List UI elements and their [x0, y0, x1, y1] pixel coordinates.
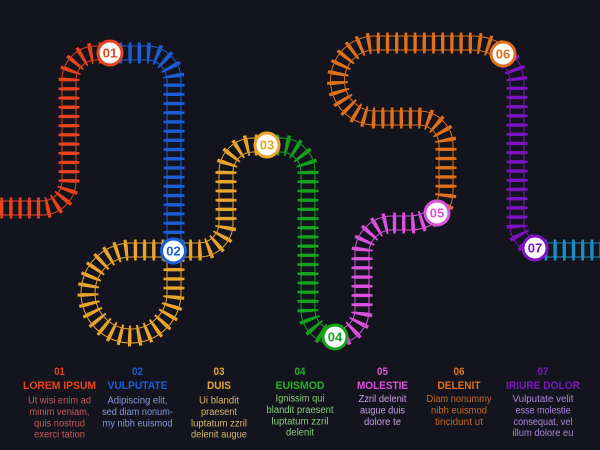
station marker 03 [255, 133, 279, 157]
legend item 07: esse molestie [516, 406, 571, 416]
legend item 04: 04 [294, 366, 306, 378]
legend item 03: praesent [201, 407, 237, 418]
legend item 05: MOLESTIE [357, 380, 408, 392]
station marker 04: 04 [328, 330, 343, 344]
legend item 06: 06 [454, 366, 464, 378]
track: teal segment [535, 249, 600, 251]
station marker 07 [523, 236, 547, 260]
legend item 07: IRIURE DOLOR [506, 380, 580, 392]
legend item 04: delenit [286, 428, 314, 438]
track: orange segment [338, 43, 503, 213]
legend item 03 [191, 366, 247, 440]
legend item 07: 07 [538, 366, 548, 378]
legend item 06: nibh euismod [431, 406, 487, 416]
legend item 01: exerci tation [34, 430, 85, 440]
legend item 06: tincidunt ut [435, 417, 483, 428]
station marker 05 [425, 201, 449, 225]
legend item 07 [506, 366, 580, 439]
legend item 01: Ut wisi enim ad [28, 396, 91, 406]
legend item 07: consequat, vel [514, 417, 572, 428]
legend item 02: my nibh euismod [102, 418, 172, 430]
legend item 03: Ui blandit [199, 396, 239, 406]
legend item 04: Ignissim qui [276, 394, 324, 404]
legend item 03: luptatum zzril [191, 418, 247, 430]
legend item 01 [23, 366, 96, 440]
legend item 04: blandit praesent [266, 405, 334, 416]
legend item 02 [102, 366, 173, 430]
legend item 05 [357, 366, 408, 428]
legend item 07: illum dolore eu [512, 428, 574, 439]
track: red segment [0, 53, 110, 208]
legend item 02: 02 [132, 366, 143, 378]
legend item 05: Zzril delenit [358, 394, 407, 405]
legend item 03: 03 [214, 366, 224, 378]
station marker 06 [491, 42, 515, 66]
legend item 01: minim veniam, [30, 407, 90, 418]
legend item 01: 01 [54, 366, 65, 378]
legend item 01: quis nostrud [34, 418, 85, 430]
legend item 05: dolore te [364, 417, 401, 428]
station marker 01: 01 [103, 46, 117, 60]
legend item 03: DUIS [207, 380, 231, 392]
track: blue segment [110, 53, 174, 251]
legend item 05: 05 [377, 366, 388, 378]
legend item 04 [266, 366, 334, 438]
legend item 02: Adipiscing elit, [108, 396, 168, 406]
track: magenta segment [335, 213, 437, 337]
legend item 05: augue duis [360, 406, 405, 416]
station marker 04 [323, 325, 347, 349]
legend item 01: LOREM IPSUM [23, 380, 96, 392]
track: yellow segment with loop [88, 145, 267, 336]
legend item 06: DELENIT [438, 380, 481, 392]
legend item 02: sed diam nonum- [102, 407, 173, 418]
track: green segment [267, 145, 335, 337]
legend item 04: EUISMOD [276, 380, 325, 392]
track: purple segment [503, 54, 535, 248]
legend item 02: VULPUTATE [108, 380, 168, 392]
legend item 06: Diam nonummy [426, 394, 492, 405]
legend item 06 [426, 366, 492, 428]
station marker 02 [162, 239, 186, 263]
legend item 04: luptatum zzril [272, 416, 328, 428]
station marker 06: 06 [496, 46, 510, 62]
station marker 07: 07 [528, 240, 542, 256]
legend item 07: Vulputate velit [512, 394, 574, 405]
station marker 05: 05 [430, 206, 444, 220]
legend item 03: delenit augue [191, 430, 247, 440]
station marker 02: 02 [166, 244, 181, 258]
station marker 03: 03 [260, 138, 274, 152]
station marker 01 [98, 41, 122, 65]
